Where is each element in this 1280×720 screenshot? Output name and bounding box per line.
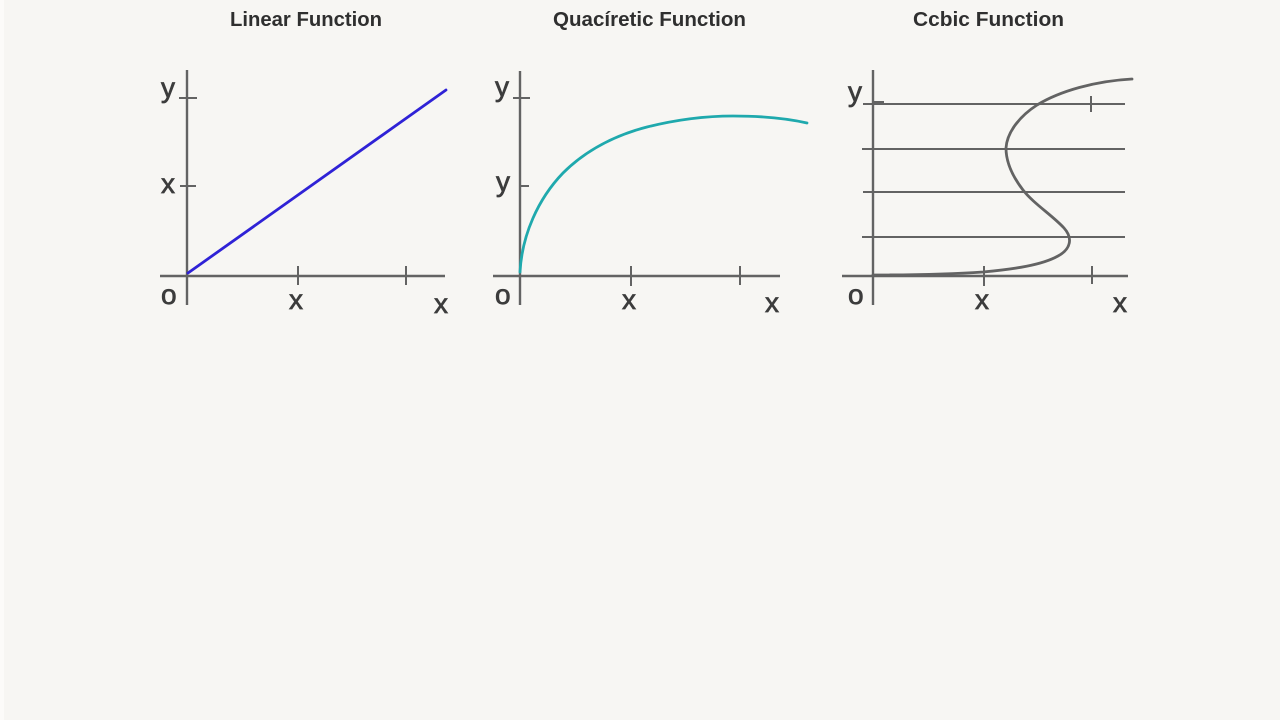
axis labels: quadratic: y (496, 166, 510, 197)
axis labels: cubic: y (848, 76, 862, 107)
axis labels: linear: y (161, 72, 175, 103)
axis labels: cubic: o (848, 279, 864, 310)
curve: cubic graph (873, 79, 1132, 275)
axis labels: quadratic: o (495, 279, 511, 310)
panel: linear function (160, 9, 448, 319)
axis labels: linear (161, 72, 448, 319)
axis labels: linear: x (289, 284, 303, 315)
axis labels: quadratic: x (765, 287, 779, 318)
heading: quadratic function: Quacíretic Function (553, 9, 746, 31)
axis labels: linear: o (161, 279, 177, 310)
axes: linear (160, 70, 445, 305)
axis labels: linear: x (161, 168, 175, 199)
axis labels: cubic: x (975, 284, 989, 315)
axis labels: linear: x (434, 288, 448, 319)
heading: linear function: Linear Function (230, 9, 382, 31)
axes and grid: cubic (842, 70, 1128, 305)
axes: quadratic (493, 71, 780, 305)
curve: quadratic graph (520, 116, 807, 272)
panel: cubic function (842, 9, 1132, 318)
axis labels: cubic: x (1113, 287, 1127, 318)
axis labels: quadratic: x (622, 284, 636, 315)
heading: cubic function: Ccbic Function (913, 9, 1064, 31)
line: linear graph (188, 90, 446, 273)
axis labels: cubic (848, 76, 1127, 318)
axis labels: quadratic (495, 71, 779, 318)
axis labels: quadratic: y (495, 71, 509, 102)
panel: quadratic function (493, 9, 807, 318)
